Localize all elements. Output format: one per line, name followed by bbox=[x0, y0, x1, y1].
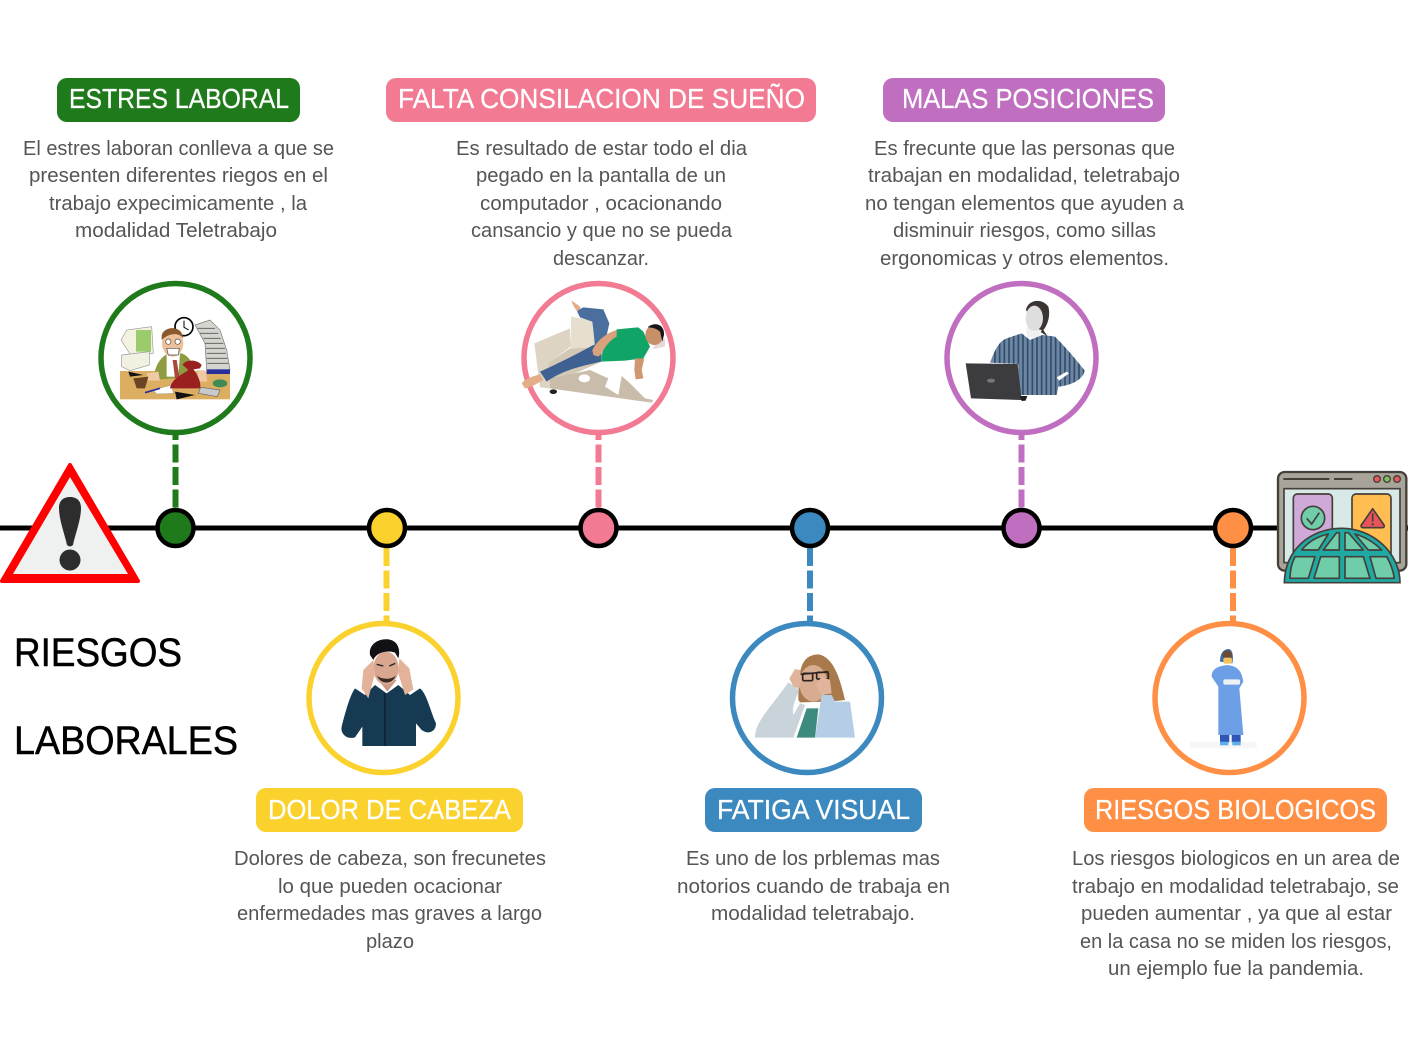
text: dolor de cabeza: plazo bbox=[366, 931, 414, 953]
text: estres laboral bbox=[23, 138, 334, 242]
text: falta de sueño: cansancio y que no se pueda bbox=[471, 220, 733, 242]
title: RIESGOS bbox=[14, 631, 182, 675]
heading: riesgos biologicos: RIESGOS BIOLOGICOS bbox=[1095, 794, 1376, 825]
title: LABORALES bbox=[14, 719, 238, 763]
text: dolor de cabeza bbox=[234, 848, 546, 953]
text: riesgos biologicos: trabajo en modalidad teletrabajo, se bbox=[1072, 876, 1399, 898]
heading: dolor de cabeza: DOLOR DE CABEZA bbox=[268, 794, 511, 825]
text: riesgos biologicos: pueden aumentar , ya que al estar bbox=[1081, 903, 1392, 925]
image: stressed office worker bbox=[101, 284, 250, 432]
timeline axis bbox=[0, 526, 1408, 530]
image: man sleeping on sofa bbox=[522, 284, 673, 432]
image: person in medical gown bbox=[1155, 624, 1304, 772]
text: malas posiciones: ergonomicas y otros elementos. bbox=[880, 248, 1169, 270]
heading: estres laboral: ESTRES LABORAL bbox=[69, 83, 289, 114]
text: fatiga visual: modalidad teletrabajo. bbox=[711, 903, 915, 925]
text: falta de sueño: computador , ocacionando bbox=[480, 193, 722, 215]
heading: estres laboral bbox=[57, 78, 300, 122]
panel: fatiga visual bbox=[677, 624, 950, 925]
text: malas posiciones: trabajan en modalidad, teletrabajo bbox=[868, 165, 1180, 187]
text: estres laboral: modalidad Teletrabajo bbox=[75, 220, 277, 242]
timeline node: orange bbox=[1215, 510, 1251, 546]
image: woman rubbing eyes bbox=[732, 624, 882, 772]
heading: dolor de cabeza bbox=[256, 788, 523, 832]
text: falta de sueño: pegado en la pantalla de un bbox=[476, 165, 726, 187]
text: dolor de cabeza: Dolores de cabeza, son frecunetes bbox=[234, 848, 546, 870]
panel: malas posiciones bbox=[865, 78, 1185, 432]
panel: dolor de cabeza bbox=[234, 624, 546, 953]
text: fatiga visual: notorios cuando de trabaja en bbox=[677, 876, 950, 898]
timeline node: purple bbox=[1004, 510, 1040, 546]
text: estres laboral: trabajo expecimicamente , la bbox=[49, 193, 308, 215]
heading: malas posiciones bbox=[883, 78, 1165, 122]
heading: malas posiciones: MALAS POSICIONES bbox=[902, 83, 1154, 114]
connector: falta de sueño bbox=[596, 435, 602, 508]
icon: browser window with globe bbox=[1278, 472, 1406, 583]
image: woman with back pain at laptop bbox=[947, 284, 1096, 432]
text: falta de sueño bbox=[456, 138, 748, 270]
heading: falta de sueño: FALTA CONSILACION DE SUEÑO bbox=[398, 83, 805, 114]
heading: fatiga visual bbox=[705, 788, 922, 832]
text: fatiga visual: Es uno de los prblemas mas bbox=[686, 848, 940, 870]
timeline node: blue bbox=[792, 510, 828, 546]
heading: fatiga visual: FATIGA VISUAL bbox=[717, 794, 910, 825]
panel: falta de sueño bbox=[386, 78, 816, 432]
panel: estres laboral bbox=[23, 78, 334, 432]
text: falta de sueño: descanzar. bbox=[553, 248, 649, 270]
text: dolor de cabeza: lo que pueden ocacionar bbox=[278, 876, 502, 898]
text: malas posiciones: no tengan elementos que ayuden a bbox=[865, 193, 1185, 215]
text: estres laboral: El estres laboran conlleva a que se bbox=[23, 138, 334, 160]
image: man with headache bbox=[309, 624, 458, 772]
text: riesgos biologicos: en la casa no se miden los riesgos, bbox=[1080, 931, 1392, 953]
heading: falta de sueño bbox=[386, 78, 816, 122]
panel: riesgos biologicos bbox=[1072, 624, 1400, 980]
connector: fatiga visual bbox=[807, 548, 813, 622]
connector: malas posiciones bbox=[1018, 435, 1024, 508]
icon: warning triangle bbox=[2, 465, 138, 581]
text: riesgos biologicos bbox=[1072, 848, 1400, 980]
timeline node: green bbox=[158, 510, 194, 546]
text: fatiga visual bbox=[677, 848, 950, 925]
text: malas posiciones: disminuir riesgos, como sillas bbox=[893, 220, 1156, 242]
text: malas posiciones: Es frecunte que las personas que bbox=[874, 138, 1175, 160]
title bbox=[14, 631, 238, 763]
text: riesgos biologicos: un ejemplo fue la pandemia. bbox=[1108, 958, 1364, 980]
timeline node: pink bbox=[580, 510, 616, 546]
text: dolor de cabeza: enfermedades mas graves a largo bbox=[237, 903, 542, 925]
text: malas posiciones bbox=[865, 138, 1185, 270]
heading: riesgos biologicos bbox=[1084, 788, 1387, 832]
connector: estres laboral bbox=[172, 435, 178, 508]
text: estres laboral: presenten diferentes riegos en el bbox=[29, 165, 328, 187]
text: riesgos biologicos: Los riesgos biologicos en un area de bbox=[1072, 848, 1400, 870]
timeline node: yellow bbox=[369, 510, 405, 546]
text: falta de sueño: Es resultado de estar todo el dia bbox=[456, 138, 748, 160]
connector: dolor de cabeza bbox=[384, 548, 390, 622]
connector: riesgos biologicos bbox=[1230, 548, 1236, 622]
